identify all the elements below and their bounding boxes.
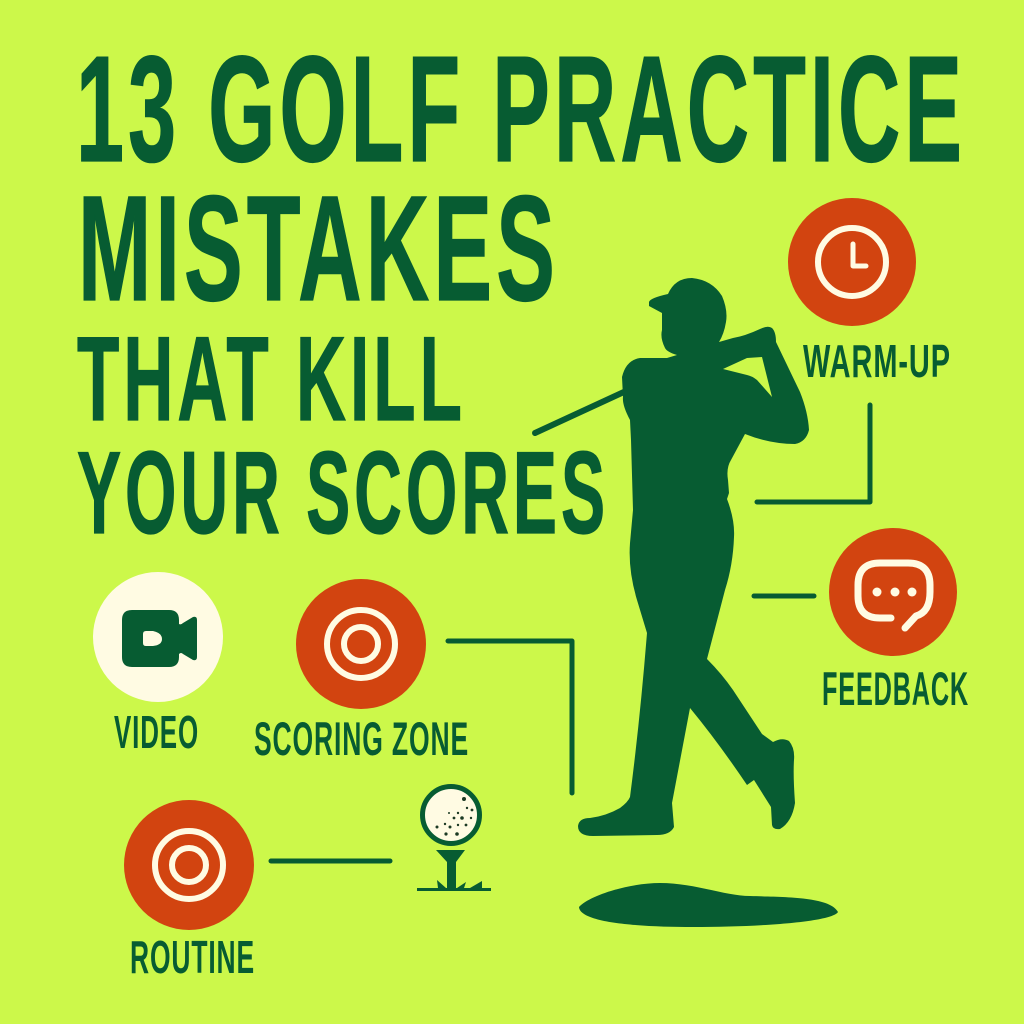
label: video: VIDEO [114,706,199,758]
label: routine: ROUTINE [130,931,255,983]
icon: scoring zone target [296,579,426,709]
ground shadow [579,883,838,927]
icon: routine target [124,800,254,930]
golf club shaft [535,391,626,433]
icon: feedback speech bubble [829,528,957,656]
icon: golf ball on tee [417,786,491,891]
title: YOUR SCORES [77,427,609,558]
icon: clock [788,198,916,326]
label: scoring zone: SCORING ZONE [254,712,469,765]
title: MISTAKES [78,164,559,332]
connector lines [271,405,870,861]
title [76,24,966,558]
icon: video camera [93,572,223,702]
golfer silhouette [578,278,809,836]
title: THAT KILL [77,312,466,446]
